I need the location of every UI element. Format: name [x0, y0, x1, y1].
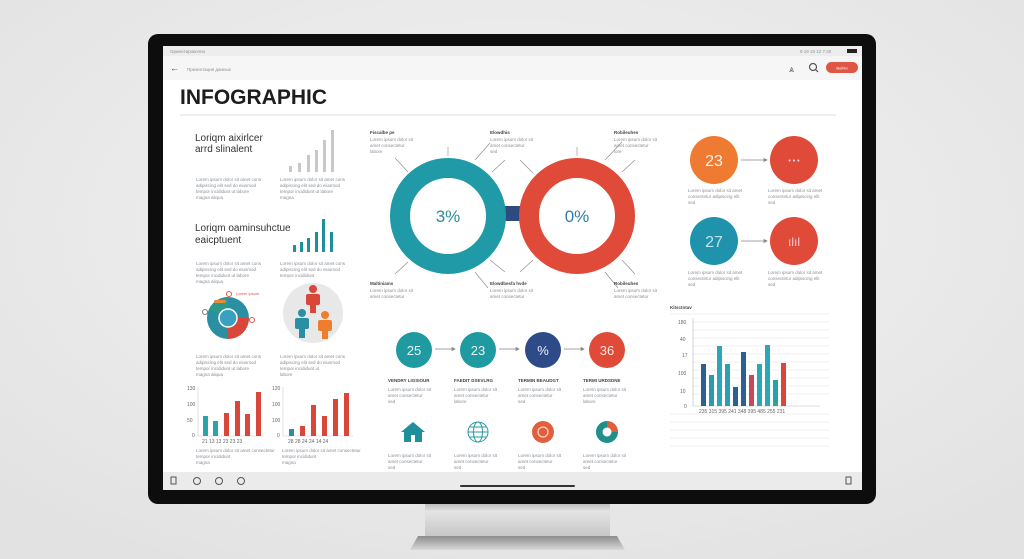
- nav bar: Презентация данных: [187, 67, 232, 72]
- teal ring: 3%: [436, 207, 460, 226]
- panel: right circles: consectetur adipiscing elit: [688, 194, 740, 199]
- bar chart grey: [289, 130, 334, 172]
- step labels: VENDRY LIGSIOUR: [388, 378, 430, 383]
- text block: magna aliqua: [196, 372, 224, 377]
- panel: right circles: ılıl: [788, 235, 800, 249]
- icon: gear orange: [532, 421, 554, 443]
- panel: rings: Lorem ipsum dolor sit: [370, 288, 414, 293]
- red ring: 0%: [565, 207, 589, 226]
- status bar: Ориентировочно: [170, 49, 206, 54]
- step labels: Lorem ipsum dolor sit: [388, 387, 432, 392]
- panel: rings: amet consectetur: [614, 294, 649, 299]
- bar chart 2: 0: [277, 433, 280, 439]
- panel: process steps: labore: [454, 399, 467, 404]
- text block: adipiscing elit sed do eiusmod: [196, 267, 257, 272]
- icon captions: [388, 453, 432, 470]
- panel: right circles: consectetur adipiscing elit: [768, 194, 820, 199]
- bar chart teal: [293, 219, 333, 252]
- panel: right circles: consectetur adipiscing elit: [688, 276, 740, 281]
- step labels: [388, 378, 432, 404]
- nav bar: [163, 56, 862, 80]
- panel: rings: lore: [614, 149, 622, 154]
- panel: process steps: amet consectetur: [583, 393, 618, 398]
- text block: magna aliqua: [196, 279, 224, 284]
- text block: [196, 261, 262, 284]
- bar chart: right: 180: [678, 320, 687, 326]
- arrows: [435, 348, 584, 350]
- panel: left column: magna: [280, 195, 294, 200]
- text block: tempor incididunt ut labore: [196, 366, 250, 371]
- panel: rings: Robileuhes: [614, 130, 639, 135]
- bar chart: right: Kitsctotav: [670, 305, 692, 310]
- panel: right circles: sed: [768, 200, 776, 205]
- title: INFOGRAPHIC: [180, 86, 327, 109]
- heading 2: [195, 223, 291, 246]
- text block: [196, 354, 262, 377]
- panel: rings: Lorem ipsum dolor sit: [490, 288, 534, 293]
- icon: pie diagram: [202, 291, 260, 339]
- bar chart: right: 40: [680, 337, 686, 343]
- panel: left column: tempor incididunt ut: [280, 366, 320, 371]
- panel: left column: Lorem ipsum dolor sit amet cons: [280, 261, 346, 266]
- heading 1: [195, 133, 263, 155]
- ring labels: Fiscalbe pe: [370, 130, 395, 135]
- panel: right circles: sed: [688, 282, 696, 287]
- panel: right circles: [688, 136, 823, 287]
- icon captions: sed: [388, 465, 396, 470]
- icon: house: [401, 422, 425, 442]
- bar chart 1: 0: [192, 433, 195, 439]
- text block: Lorem ipsum dolor sit amet cons: [196, 261, 262, 266]
- bar chart 1: [187, 386, 264, 445]
- panel: right circles: Lorem ipsum dolor sit amet: [688, 188, 743, 193]
- bar chart 2: 100: [272, 418, 281, 424]
- panel: left column: Lorem ipsum dolor sit amet consectetur: [282, 448, 361, 453]
- bar chart: right: 0: [684, 404, 687, 410]
- panel: process steps: amet consectetur: [454, 393, 489, 398]
- panel: right circles: Lorem ipsum dolor sit amet: [688, 270, 743, 275]
- panel: left column: Lorem ipsum dolor sit amet cons: [280, 354, 346, 359]
- bar chart: right: 235 315 395 241 348 395 485 255 231: [699, 409, 785, 415]
- status bar: 9 19 10 12 7:40: [800, 49, 832, 54]
- nav bar: ←: [170, 63, 179, 73]
- panel: process steps: %: [537, 343, 549, 358]
- heading 1: Loriqm aixirlcer: [195, 133, 263, 144]
- panel: process steps: amet consectetur: [454, 459, 489, 464]
- panel: process steps: sed: [518, 399, 526, 404]
- ring labels: labore: [370, 149, 383, 154]
- icon: globe: [468, 422, 488, 442]
- bar chart 1: 50: [187, 418, 193, 424]
- teal ring: [400, 168, 496, 264]
- text block: magna aliqua: [196, 195, 224, 200]
- nav bar: Войти: [836, 66, 848, 70]
- bar chart: right: [670, 305, 830, 446]
- panel: process steps: sed: [583, 465, 591, 470]
- panel: rings: Maltiniams: [370, 281, 394, 286]
- red ring: [529, 168, 625, 264]
- panel: left column: [187, 130, 361, 465]
- panel: process steps: TERMIN BEAUDGT: [518, 378, 559, 383]
- panel: right circles: Lorem ipsum dolor sit amet: [768, 188, 823, 193]
- panel: process steps: [388, 332, 627, 470]
- panel: process steps: Lorem ipsum dolor sit: [454, 453, 498, 458]
- panel: process steps: TERMI URDSDNE: [583, 378, 621, 383]
- callout lines: [395, 142, 635, 288]
- text block: magna: [196, 460, 210, 465]
- panel: right circles: consectetur adipiscing elit: [768, 276, 820, 281]
- panel: rings: Lorem ipsum dolor sit: [614, 288, 658, 293]
- panel: rings: sed: [490, 149, 498, 154]
- panel: right circles: 27: [705, 234, 723, 251]
- bar chart 1: 100: [187, 402, 196, 408]
- panel: process steps: sed: [454, 465, 462, 470]
- monitor stand: [410, 500, 625, 550]
- step labels: amet consectetur: [388, 393, 423, 398]
- panel: process steps: Lorem ipsum dolor sit: [583, 453, 627, 458]
- bar chart 2: [272, 386, 353, 445]
- text block: [196, 177, 262, 200]
- panel: rings: Lorem ipsum dolor sit: [614, 137, 658, 142]
- text block: adipiscing elit sed do eiusmod: [196, 360, 257, 365]
- icon: gear teal: [596, 421, 618, 443]
- nav bar: ⩓: [789, 64, 794, 74]
- panel: process steps: 25: [407, 343, 421, 358]
- panel: process steps: Lorem ipsum dolor sit: [583, 387, 627, 392]
- panel: left column: labore: [280, 372, 293, 377]
- panel: left column: tempor incididunt: [280, 273, 315, 278]
- panel: rings: amet consectetur: [370, 294, 405, 299]
- panel: process steps: 23: [471, 343, 485, 358]
- icon: pie diagram: Lorem ipsum: [236, 291, 260, 296]
- panel: process steps: sed: [518, 465, 526, 470]
- bar chart: right: 100: [678, 371, 687, 377]
- ring labels: [370, 130, 414, 154]
- bar chart 2: 28 28 24 24 14 24: [288, 439, 329, 445]
- ring labels: Lorem ipsum dolor sit: [370, 137, 414, 142]
- panel: left column: Lorem ipsum dolor sit amet cons: [280, 177, 346, 182]
- panel: rings: amet consectetur: [490, 143, 525, 148]
- panel: process steps: 36: [600, 343, 614, 358]
- text block: Lorem ipsum dolor sit amet cons: [196, 354, 262, 359]
- heading 2: eaicptuent: [195, 235, 241, 246]
- panel: left column: adipiscing elit sed do eiusmod: [280, 267, 341, 272]
- bar chart 2: 100: [272, 402, 281, 408]
- panel: rings: Elowdbesfa hvde: [490, 281, 527, 286]
- panel: left column: tempor incididunt: [282, 454, 317, 459]
- panel: right circles: sed: [768, 282, 776, 287]
- panel: right circles: sed: [688, 200, 696, 205]
- ring labels: amet consectetur: [370, 143, 405, 148]
- panel: process steps: amet consectetur: [518, 393, 553, 398]
- panel: left column: magna: [282, 460, 296, 465]
- panel: left column: tempor incididunt ut labore: [280, 189, 334, 194]
- panel: rings: Robileuhes: [614, 281, 639, 286]
- text block: Lorem ipsum dolor sit amet cons: [196, 177, 262, 182]
- bar chart 1: 130: [187, 386, 196, 392]
- panel: process steps: Lorem ipsum dolor sit: [518, 387, 562, 392]
- ring connector: [488, 206, 534, 221]
- panel: process steps: amet consectetur: [518, 459, 553, 464]
- panel: right circles: • • •: [788, 158, 800, 165]
- panel: process steps: FAEDIT DSEVLRG: [454, 378, 494, 383]
- icon captions: amet consectetur: [388, 459, 423, 464]
- monitor bezel: [148, 34, 876, 504]
- panel: rings: amet consectetur: [614, 143, 649, 148]
- bottom toolbar: [163, 472, 862, 490]
- text block: tempor incididunt ut labore: [196, 189, 250, 194]
- text block: tempor incididunt ut labore: [196, 273, 250, 278]
- text block: adipiscing elit sed do eiusmod: [196, 183, 257, 188]
- heading 1: arrd slinalent: [195, 144, 252, 155]
- status bar: [163, 46, 862, 56]
- panel: rings: Lorem ipsum dolor sit: [490, 137, 534, 142]
- text block: tempor incididunt: [196, 454, 231, 459]
- icon: people: [283, 283, 343, 343]
- panel: right circles: Lorem ipsum dolor sit amet: [768, 270, 823, 275]
- panel: process steps: amet consectetur: [583, 459, 618, 464]
- icon captions: Lorem ipsum dolor sit: [388, 453, 432, 458]
- panel: process steps: Lorem ipsum dolor sit: [518, 453, 562, 458]
- panel: left column: adipiscing elit sed do eiusmod: [280, 360, 341, 365]
- text block: [196, 448, 275, 465]
- panel: rings: Elowdhis: [490, 130, 510, 135]
- panel: left column: adipiscing elit sed do eiusmod: [280, 183, 341, 188]
- panel: rings: amet consectetur: [490, 294, 525, 299]
- panel: rings: [370, 130, 658, 299]
- panel: right circles: 23: [705, 153, 723, 170]
- text block: Lorem ipsum dolor sit amet consectetur: [196, 448, 275, 453]
- panel: process steps: Lorem ipsum dolor sit: [454, 387, 498, 392]
- bar chart 2: 120: [272, 386, 281, 392]
- bar chart: right: 10: [680, 389, 686, 395]
- step labels: sed: [388, 399, 396, 404]
- bar chart: right: 17: [682, 353, 688, 359]
- bar chart 1: 21 13 13 23 23 23: [202, 439, 243, 445]
- heading 2: Loriqm oaminsuhctue: [195, 223, 291, 234]
- panel: process steps: labore: [583, 399, 596, 404]
